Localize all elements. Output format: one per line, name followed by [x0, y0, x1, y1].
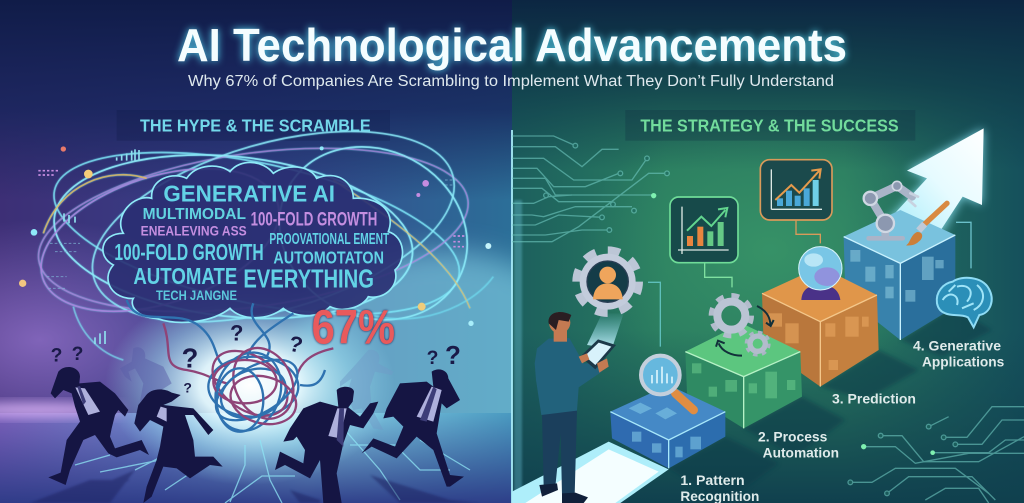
question marks: ?: [182, 342, 198, 373]
circuit traces top left: [512, 136, 669, 242]
cloud words: AUTOMOTATON: [273, 247, 384, 267]
block 4 generative: [844, 210, 955, 340]
runner 1: [48, 367, 149, 485]
cloud words: EVERYTHING: [243, 264, 374, 294]
label: step 1: 1. Pattern: [680, 472, 745, 488]
block 1 pattern recognition: [610, 385, 725, 468]
runner 3: [275, 387, 378, 503]
67 percent stat: 67%: [312, 300, 395, 354]
cloud words: TECH JANGNE: [156, 287, 237, 303]
label: step 2: Automation: [763, 445, 839, 461]
question marks: ?: [183, 380, 192, 396]
cloud words: MULTIMODAL: [143, 206, 246, 223]
right scene: [512, 110, 1024, 503]
panel: right strategy background: [511, 0, 1024, 503]
runner 2: [134, 389, 223, 503]
icon: magnifier: [641, 356, 694, 410]
cloud words: [114, 181, 390, 303]
cloud words: AUTOMATE: [133, 263, 237, 289]
runner 4: [362, 369, 464, 487]
growth arrow: [882, 128, 984, 233]
question marks: ?: [51, 346, 62, 367]
step labels: [680, 337, 1005, 503]
cloud words: GENERATIVE AI: [163, 181, 335, 207]
glowing circuit nodes: [651, 193, 935, 455]
block shadows: [669, 307, 992, 503]
orbit lines: [23, 95, 498, 360]
icon: crystal ball: [799, 247, 842, 300]
cloud words: 100-FOLD GROWTH: [251, 210, 377, 231]
cloud words: ENEALEVING ASS: [141, 223, 247, 239]
label: step 2: [758, 428, 839, 461]
cloud words: 100-FOLD GROWTH: [114, 239, 264, 265]
icon: person gear: [577, 251, 638, 348]
label: step 3: 3. Prediction: [832, 391, 916, 407]
question marks: ?: [287, 331, 305, 358]
heading: the hype and the scramble: THE HYPE & THE SCRAMBLE: [140, 116, 371, 136]
floor light path: [512, 442, 669, 503]
icon: chart card green: [670, 197, 738, 263]
label: step 4: Applications: [922, 354, 1005, 370]
label: step 1: [680, 472, 759, 503]
label: step 2: 2. Process: [758, 428, 828, 444]
panel: left hype background: [0, 0, 590, 503]
left scene: [19, 95, 498, 503]
question marks: ?: [230, 321, 243, 346]
question marks: ?: [427, 348, 438, 369]
icon: process gears: [712, 296, 774, 356]
icon: paintbrush: [906, 203, 947, 246]
heading: the strategy and the success: [625, 110, 915, 141]
question marks: [51, 321, 461, 396]
person with tablet: [535, 312, 616, 503]
cloud words: PROOVATIONAL EMENT: [269, 231, 390, 248]
icon: chart card orange: [760, 160, 832, 220]
label: step 4: 4. Generative: [913, 337, 1001, 353]
icon: robot arm: [864, 181, 918, 238]
heading: the hype and the scramble: [117, 110, 390, 141]
block 2 process automation: [685, 323, 802, 428]
hype cloud: [103, 162, 403, 322]
question marks: ?: [445, 340, 461, 370]
circuit traces bottom right: [848, 407, 1024, 503]
block 3 prediction: [762, 267, 879, 387]
subtitle: Why 67% of Companies Are Scrambling to Implement What They Don’t Fully Understand: [188, 73, 834, 90]
ghost runners: [120, 347, 393, 430]
question marks: ?: [72, 344, 83, 365]
icon: brain: [937, 278, 992, 327]
glowing nodes and mini charts: [19, 146, 491, 344]
tangled threads: [127, 300, 333, 440]
title: AI Technological Advancements: [177, 19, 847, 71]
heading: the strategy and the success: THE STRATEGY & THE SUCCESS: [640, 116, 899, 136]
label: step 4: [913, 337, 1005, 370]
icon: connector lines: [648, 220, 971, 347]
